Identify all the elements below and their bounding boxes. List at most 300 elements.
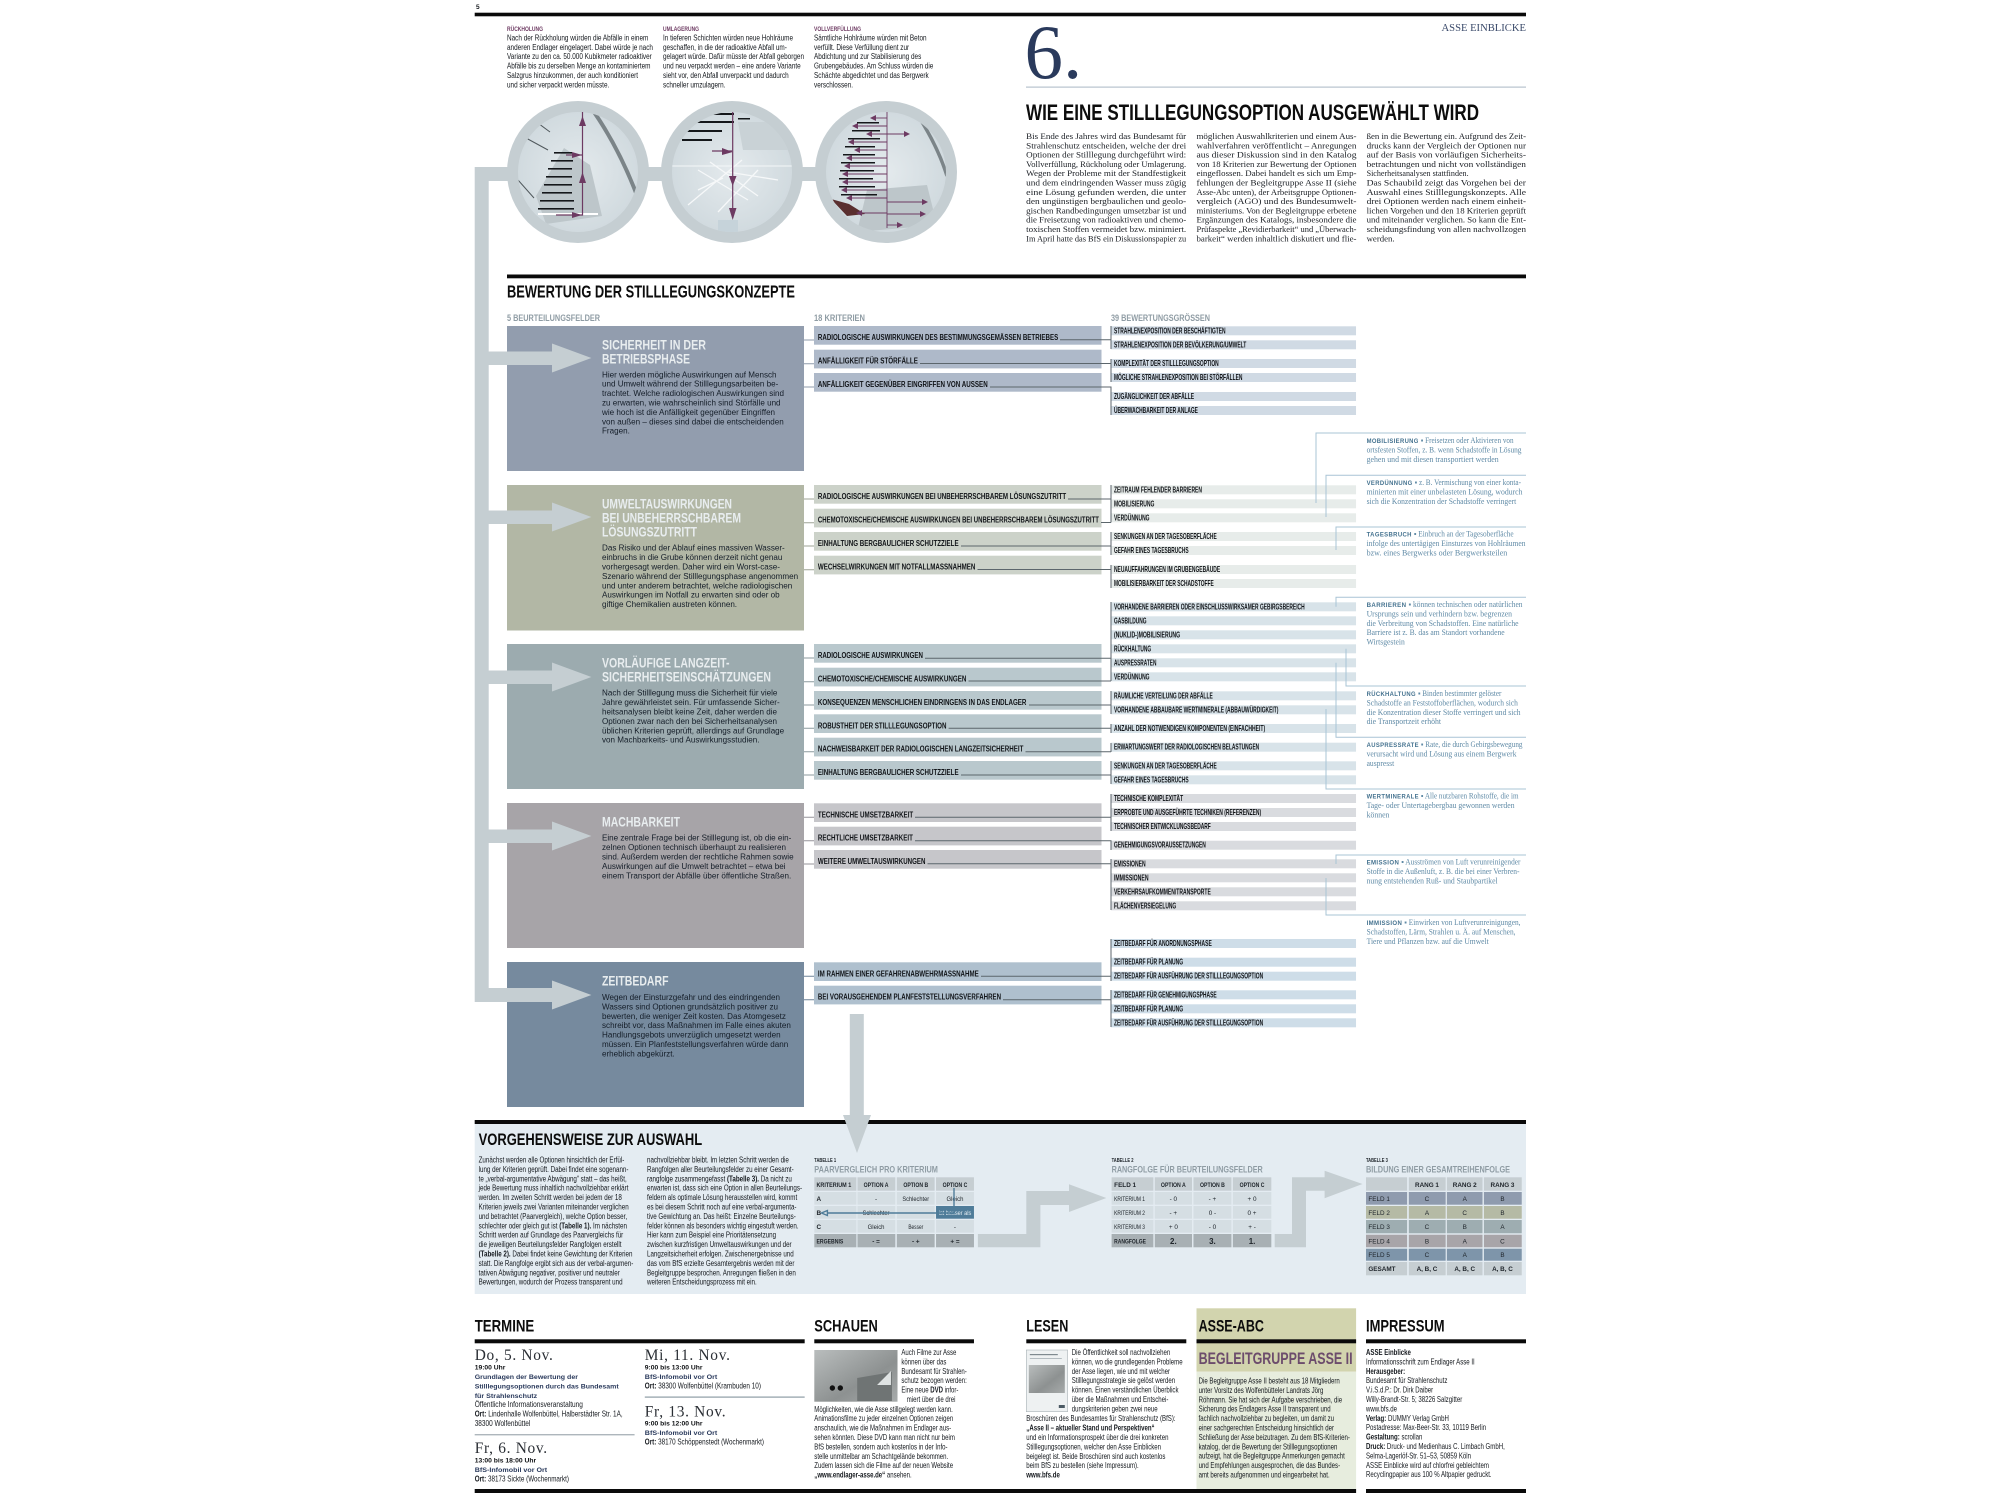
text block: intro column 2: wahlverfahren veröffentlicht – Anregungen bbox=[1196, 141, 1356, 150]
column heading: 39 Bewertungsgrößen: 39 BEWERTUNGSGRÖSSEN bbox=[1111, 312, 1210, 323]
body text: Nach der Stilllegung muss die Sicherheit für viele bbox=[602, 689, 778, 698]
text column 1: und betrachtet (Paarvergleich), welche Option besser, bbox=[479, 1213, 627, 1221]
subheading: BEGLEITGRUPPE ASSE II bbox=[1199, 1350, 1353, 1368]
text block: intro column 2: fehlungen der Begleitgruppe Asse II (siehe bbox=[1196, 178, 1357, 188]
text: Herausgeber: bbox=[1366, 1368, 1405, 1376]
text: Vollverfüllung: VOLLVERFÜLLUNG bbox=[814, 24, 861, 33]
term: Verdünnung: minierten mit einer unbelasteten Lösung, wodurch bbox=[1367, 487, 1523, 496]
heading: SCHAUEN bbox=[814, 1318, 878, 1336]
panel: criteria labels: RECHTLICHE UMSETZBARKEIT bbox=[818, 833, 914, 843]
table 3: Bildung einer Gesamtreihenfolge: C bbox=[1462, 1210, 1467, 1217]
text column 2: felder können als besonders wichtig eingestuft werden. bbox=[647, 1223, 799, 1231]
value labels: VORHANDENE ABBAUBARE WERTMINERALE (ABBAUWÜRDIGKEIT) bbox=[1114, 705, 1279, 714]
text below image: Möglichkeiten, wie die Asse stillgelegt werden kann. bbox=[814, 1406, 953, 1414]
text below image: Stilllegungsoptionen, welcher den Asse Einblicken bbox=[1026, 1444, 1161, 1452]
table 1: Paarvergleich pro Kriterium: Besser bbox=[908, 1224, 924, 1231]
table 1: Paarvergleich pro Kriterium: - bbox=[954, 1224, 956, 1231]
term: Emission bbox=[1367, 857, 1521, 885]
panel: Vorgehensweise zur Auswahl bbox=[475, 1120, 1526, 1294]
text block: intro column 2: aus dieser Diskussion sind in den Katalog bbox=[1196, 151, 1356, 160]
event: Do, 5. Nov.: Öffentliche Informationsveranstaltung bbox=[475, 1400, 583, 1409]
heading: VORGEHENSWEISE ZUR AUSWAHL bbox=[479, 1131, 702, 1149]
text column 2: rangfolge zusammengefasst (Tabelle 3). Da nicht zu bbox=[647, 1176, 792, 1184]
body text: Auswirkungen auf die Umwelt betrachtet – etwa bei bbox=[602, 862, 786, 871]
body text bbox=[602, 993, 791, 1058]
panel: criteria labels: WECHSELWIRKUNGEN MIT NOTFALLMASSNAHMEN bbox=[818, 562, 975, 572]
table 2: Rangfolge für Beurteilungsfelder: KRITERIUM 2 bbox=[1114, 1210, 1145, 1217]
text block: intro column 3: Auswahl eines Stilllegungskonzepts. Alle bbox=[1367, 188, 1526, 197]
panel: glossary bbox=[1367, 436, 1525, 946]
panel: Zeitbedarf bbox=[488, 962, 804, 1107]
text: Vollverfüllung: verschlossen. bbox=[814, 81, 853, 90]
text: können über das bbox=[901, 1359, 947, 1367]
panel: Vorläufige Langzeit-Sicherheitseinschätzungen bbox=[488, 644, 804, 789]
event: Fr, 13. Nov.: 9:00 bis 12:00 Uhr bbox=[645, 1420, 703, 1428]
panel: criteria labels: NACHWEISBARKEIT DER RADIOLOGISCHEN LANGZEITSICHERHEIT bbox=[818, 744, 1024, 754]
text block: intro column 1: Bis Ende des Jahres wird das Bundesamt für bbox=[1026, 132, 1186, 141]
text block: intro column 1: gischen Randbedingungen umsetzbar ist und bbox=[1026, 206, 1186, 215]
event: Do, 5. Nov. bbox=[475, 1347, 623, 1428]
body text: Eine zentrale Frage bei der Stilllegung ist, ob die ein- bbox=[602, 834, 792, 843]
arrow: comparison reading direction bbox=[821, 1188, 954, 1216]
table 2: Rangfolge für Beurteilungsfelder: 3. bbox=[1209, 1237, 1216, 1246]
table 2: Rangfolge für Beurteilungsfelder: - 0 bbox=[1209, 1224, 1217, 1231]
text block: intro column 3: und miteinander verglichen. So kann die Ent- bbox=[1367, 216, 1526, 225]
text: und Empfehlungen ausgesprochen, die das Bundes- bbox=[1199, 1463, 1341, 1470]
table 1: Paarvergleich pro Kriterium: OPTION A bbox=[864, 1182, 889, 1189]
panel: criteria labels: IM RAHMEN EINER GEFAHRENABWEHRMASSNAHME bbox=[818, 968, 979, 978]
event: Mi, 11. Nov.: BfS-Infomobil vor Ort bbox=[645, 1374, 718, 1381]
table 3: Bildung einer Gesamtreihenfolge: RANG 2 bbox=[1453, 1182, 1477, 1189]
table 1: Paarvergleich pro Kriterium: ist besser als bbox=[939, 1210, 971, 1217]
table 3: Bildung einer Gesamtreihenfolge: B bbox=[1425, 1238, 1429, 1246]
heading: Bewertung der Stilllegungskonzepte: BEWERTUNG DER STILLLEGUNGSKONZEPTE bbox=[507, 282, 795, 302]
table 1: Paarvergleich pro Kriterium: Gleich bbox=[947, 1196, 964, 1203]
value labels: NEUAUFFAHRUNGEN IM GRUBENGEBÄUDE bbox=[1114, 565, 1220, 574]
table 1: Paarvergleich pro Kriterium: - + bbox=[912, 1238, 920, 1246]
value labels: STRAHLENEXPOSITION DER BEVÖLKERUNG/UMWELT bbox=[1114, 340, 1246, 349]
image: film still bbox=[814, 1350, 898, 1402]
table 3: Bildung einer Gesamtreihenfolge: A bbox=[1463, 1238, 1468, 1246]
panel: Asse-ABC bbox=[1196, 1318, 1356, 1480]
body text: giftige Chemikalien austreten können. bbox=[602, 600, 737, 609]
title: VORLÄUFIGE LANGZEIT- bbox=[602, 654, 730, 670]
body text: sind. Außerdem werden der rechtliche Rahmen sowie bbox=[602, 853, 794, 861]
panel: criteria labels: CHEMOTOXISCHE/CHEMISCHE AUSWIRKUNGEN BEI UNBEHERRSCHBAREM LÖSUNGSZUTRITT bbox=[818, 515, 1099, 525]
title: MACHBARKEIT bbox=[602, 814, 680, 830]
table 3: Bildung einer Gesamtreihenfolge: A bbox=[1500, 1224, 1505, 1231]
value labels: SENKUNGEN AN DER TAGESOBERFLÄCHE bbox=[1114, 532, 1217, 541]
text column 2: Langzeitsicherheit erfolgen. Zwischenergebnisse und bbox=[647, 1251, 794, 1259]
text block: intro column 1: toxischen Stoffen vermeidet bzw. minimiert. bbox=[1026, 225, 1186, 234]
value labels: (NUKLID-)MOBILISIERUNG bbox=[1114, 630, 1180, 639]
text: Röhmann. Sie hat sich der Aufgabe verschrieben, die bbox=[1199, 1397, 1342, 1405]
arrow: table 2 to table 3 bbox=[1275, 1171, 1362, 1247]
text beside image: Die Öffentlichkeit soll nachvollziehen bbox=[1072, 1348, 1170, 1357]
text column 2: tive Gewichtung an. Das heißt: Einzelne Beurteilungs- bbox=[647, 1213, 796, 1221]
title: BETRIEBSPHASE bbox=[602, 350, 690, 366]
table 3: Bildung einer Gesamtreihenfolge: A bbox=[1463, 1252, 1468, 1259]
arrow bbox=[488, 502, 591, 532]
text: aufzeigt, hat die Begleitgruppe Anmerkungen gemacht bbox=[1199, 1453, 1345, 1461]
term: Tagesbruch: TAGESBRUCH ▪ Einbruch an der Tagesoberfläche bbox=[1367, 529, 1514, 539]
text block: intro column 3: ßen in die Bewertung ein. Aufgrund des Zeit- bbox=[1367, 132, 1526, 141]
icon: circle Umlagerung bbox=[661, 101, 803, 243]
text: einer sachgerechten Entscheidung hinsichtlich der bbox=[1199, 1425, 1335, 1433]
table 1: Paarvergleich pro Kriterium: ERGEBNIS bbox=[816, 1238, 843, 1246]
arrow bbox=[488, 662, 591, 692]
text below image: Zudem lassen sich die Filme auf der neuen Website bbox=[814, 1463, 953, 1470]
text block: intro column 1: und dem eindringenden Wasser muss zügig bbox=[1026, 178, 1186, 188]
panel: Sicherheit in der Betriebsphase bbox=[488, 326, 804, 471]
icon: circle Rückholung bbox=[507, 101, 649, 243]
text: Rückholung: RÜCKHOLUNG bbox=[507, 24, 543, 33]
text block: intro column 2: barkeit“ werden inhaltlich diskutiert und flie- bbox=[1196, 234, 1357, 243]
group 2 bars bbox=[1111, 485, 1356, 588]
table 1: Paarvergleich pro Kriterium: - = bbox=[872, 1238, 880, 1246]
term: Tagesbruch: bzw. eines Bergwerks oder Bergwerksteilen bbox=[1367, 548, 1507, 557]
table 3: Bildung einer Gesamtreihenfolge: RANG 1 bbox=[1415, 1182, 1439, 1189]
event: Fr, 13. Nov. bbox=[645, 1403, 764, 1446]
table 1: Paarvergleich pro Kriterium: B bbox=[816, 1210, 821, 1217]
value labels: ZEITBEDARF FÜR ANORDNUNGSPHASE bbox=[1114, 939, 1212, 948]
term: Mobilisierung bbox=[1367, 436, 1522, 464]
table 3: Bildung einer Gesamtreihenfolge: FELD 2 bbox=[1368, 1210, 1390, 1217]
event: Mi, 11. Nov. bbox=[645, 1347, 761, 1390]
text: Selma-Lagerlöf-Str. 51–53, 50859 Köln bbox=[1366, 1453, 1471, 1461]
body text: vorhergesagt werden. Daher wird ein Worst-case- bbox=[602, 563, 780, 571]
text block: intro column 3: drucks kann der Vergleich der Optionen nur bbox=[1367, 141, 1526, 150]
text below image: anschaulich, wie die Maßnahmen im Endlager aus- bbox=[814, 1425, 952, 1433]
text column 1: te „verbal-argumentative Abwägung“ statt – das heißt, bbox=[479, 1176, 627, 1184]
text: ASSE Einblicke bbox=[1366, 1349, 1411, 1357]
text column 2: nachvollziehbar bleibt. Im letzten Schritt werden die bbox=[647, 1157, 789, 1165]
table 2: Rangfolge für Beurteilungsfelder: 1. bbox=[1249, 1237, 1255, 1246]
panel: criteria labels bbox=[818, 332, 1099, 1002]
text block: intro column 1: Vollverfüllung, Rückholung oder Umlagerung. bbox=[1026, 160, 1186, 169]
text block: intro column 2: vergleich (AGO) und des Bundesumwelt- bbox=[1196, 197, 1357, 206]
body text: Wassers sind Optionen grundsätzlich positiver zu bbox=[602, 1002, 778, 1011]
panel: criteria bars bbox=[814, 326, 1102, 1004]
event: Do, 5. Nov.: Stilllegungsoptionen durch das Bundesamt bbox=[475, 1383, 619, 1390]
table 2: Rangfolge für Beurteilungsfelder: + 0 bbox=[1169, 1224, 1178, 1231]
term: Mobilisierung: ortsfesten Stoffen, z. B. wenn Schadstoffe in Lösung bbox=[1367, 445, 1522, 454]
text column 1: Bewertungen, wodurch der Prozess transparent und bbox=[479, 1279, 623, 1287]
text beside image: können, wo die grundlegenden Probleme bbox=[1072, 1359, 1183, 1367]
text column 1 bbox=[478, 1157, 634, 1287]
term: Auspressrate: verursacht wird und Lösung aus einem Bergwerk bbox=[1367, 749, 1517, 758]
panel: 39 assessment values bbox=[1111, 326, 1356, 1027]
value labels: AUSPRESSRATEN bbox=[1114, 658, 1157, 667]
text: Umlagerung bbox=[663, 26, 804, 90]
term: Wertminerale bbox=[1367, 791, 1519, 819]
panel: criteria labels: RADIOLOGISCHE AUSWIRKUNGEN DES BESTIMMUNGSGEMÄSSEN BETRIEBES bbox=[818, 332, 1058, 342]
arrow bbox=[488, 822, 591, 850]
text: katalog, der die Bewertung der Stilllegungsoptionen bbox=[1199, 1444, 1338, 1452]
table 1: Paarvergleich pro Kriterium: Gleich bbox=[868, 1224, 885, 1231]
table 2: Rangfolge für Beurteilungsfelder: KRITERIUM 3 bbox=[1114, 1224, 1145, 1231]
text beside image: können. Einen verständlichen Überblick bbox=[1072, 1386, 1179, 1395]
text: Bundesamt für Strahlen- bbox=[901, 1368, 967, 1376]
text below image: sehen könnten. Diese DVD kann man nicht nur beim bbox=[814, 1434, 955, 1442]
value labels bbox=[1114, 326, 1305, 1027]
value labels: EMISSIONEN bbox=[1114, 859, 1146, 868]
text block: intro column 2: eingeflossen. Dabei handelt es sich um Emp- bbox=[1196, 169, 1357, 178]
text column 2: erwarten ist, dass sich eine Option in allen Beurteilungs- bbox=[647, 1185, 803, 1193]
publication name: ASSE EINBLICKE bbox=[1442, 23, 1526, 34]
body text: zu erwarten, wie wahrscheinlich sind Störfälle und bbox=[602, 399, 781, 407]
value labels: ZUGÄNGLICHKEIT DER ABFÄLLE bbox=[1114, 392, 1194, 401]
text beside image: dungskriterien geben zwei neue bbox=[1072, 1406, 1158, 1414]
text: Sicherung des Endlagers Asse II transparent und bbox=[1199, 1406, 1331, 1414]
text: Postadresse: Max-Beer-Str. 33, 10119 Berlin bbox=[1366, 1425, 1486, 1432]
text: Umlagerung: sieht vor, den Abfall unverpackt und dadurch bbox=[663, 71, 789, 80]
text block: intro column 1: Optionen der Stilllegung durchgeführt wird: bbox=[1026, 151, 1186, 160]
body text: einem Transport der Abfälle über öffentliche Straßen. bbox=[602, 871, 791, 880]
value labels: GENEHMIGUNGSVORAUSSETZUNGEN bbox=[1114, 841, 1206, 850]
table 3: Bildung einer Gesamtreihenfolge: A, B, C bbox=[1492, 1266, 1513, 1273]
body text: trachtet. Welche radiologischen Auswirkungen sind bbox=[602, 389, 784, 398]
body text: schreibt vor, dass Maßnahmen im Falle eines akuten bbox=[602, 1021, 791, 1030]
table 3: Bildung einer Gesamtreihenfolge: B bbox=[1500, 1196, 1505, 1203]
table 3: Bildung einer Gesamtreihenfolge: BILDUNG EINER GESAMTREIHENFOLGE bbox=[1366, 1165, 1510, 1175]
table 1: Paarvergleich pro Kriterium: Schlechter bbox=[863, 1210, 890, 1217]
text column 1: jede Bewertung muss inhaltlich nachvollziehbar erklärt bbox=[478, 1185, 628, 1193]
term: Tagesbruch: infolge des untertägigen Einsturzes von Hohlräumen bbox=[1367, 539, 1525, 548]
term: Auspressrate: AUSPRESSRATE ▪ Rate, die durch Gebirgsbewegung bbox=[1367, 740, 1523, 749]
section rule bbox=[507, 274, 1526, 278]
term: Barrieren: Wirtsgestein bbox=[1367, 638, 1405, 647]
text block: intro column 1: eine Lösung gefunden werden, die unter bbox=[1026, 188, 1187, 197]
text column 1: lung der Kriterien geprüft. Dabei findet eine sogenann- bbox=[479, 1166, 629, 1174]
text below image: stelle unmittelbar am Schachtgelände bekommen. bbox=[814, 1453, 948, 1461]
event: Fr, 6. Nov.: Fr, 6. Nov. bbox=[475, 1440, 548, 1457]
text beside image: Stilllegungsstrategie sie gelöst werden bbox=[1072, 1378, 1175, 1385]
text: Informationsschrift zum Endlager Asse II bbox=[1366, 1359, 1475, 1367]
table 2: Rangfolge für Beurteilungsfelder: TABELLE 2 bbox=[1112, 1158, 1133, 1164]
event: Fr, 6. Nov.: BfS-Infomobil vor Ort bbox=[475, 1467, 548, 1474]
term: Emission: nung entstehenden Ruß- und Staubpartikel bbox=[1367, 876, 1498, 885]
table 3: Bildung einer Gesamtreihenfolge: A bbox=[1463, 1196, 1468, 1203]
event: Do, 5. Nov.: für Strahlenschutz bbox=[475, 1393, 538, 1400]
term: Rückhaltung: Schadstoffe an Feststoffoberflächen, wodurch sich bbox=[1367, 698, 1518, 707]
text block: intro column 1: die Freisetzung von radioaktiven und chemo- bbox=[1026, 216, 1186, 225]
term: Barrieren bbox=[1367, 600, 1523, 647]
text below image: www.bfs.de bbox=[1025, 1472, 1060, 1480]
body text: Hier werden mögliche Auswirkungen auf Mensch bbox=[602, 370, 777, 379]
text bbox=[1199, 1378, 1350, 1480]
table 2: Rangfolge für Beurteilungsfelder: 0 - bbox=[1209, 1210, 1216, 1217]
table 2: Rangfolge für Beurteilungsfelder: - + bbox=[1170, 1210, 1177, 1217]
body text: müssen. Ein Planfeststellungsverfahren würde dann bbox=[602, 1040, 788, 1049]
group 3 bars bbox=[1111, 602, 1356, 784]
term: Emission: EMISSION ▪ Ausströmen von Luft verunreinigender bbox=[1367, 857, 1521, 867]
text block: intro column 3: auf der Basis von vorläufigen Sicherheits- bbox=[1367, 151, 1526, 160]
table 2: Rangfolge für Beurteilungsfelder: FELD 1 bbox=[1114, 1182, 1137, 1189]
text: Umlagerung: gelagert würde. Dafür müsste der Abfall geborgen bbox=[663, 53, 804, 61]
text: Vollverfüllung: Abdichtung und zur Stabilisierung des bbox=[814, 53, 922, 61]
body text: Jahre gewährleistet sein. Für umfassende Sicher- bbox=[602, 698, 780, 707]
text: amt bereits aufgenommen und eingearbeitet hat. bbox=[1199, 1472, 1330, 1480]
term: Barrieren: die Verbreitung von Schadstoffen. Eine natürliche bbox=[1367, 619, 1519, 628]
value labels: ZEITBEDARF FÜR PLANUNG bbox=[1114, 958, 1183, 967]
divider bbox=[1026, 87, 1526, 88]
text block: intro column 3: Sicherheitsanalysen stattfinden. bbox=[1367, 169, 1469, 178]
table 2: Rangfolge für Beurteilungsfelder: RANGFOLGE bbox=[1114, 1238, 1146, 1246]
text: Umlagerung: geschaffen, in die der radioaktive Abfall um- bbox=[663, 43, 787, 52]
text: Vollverfüllung bbox=[814, 24, 933, 90]
text: Schließung der Asse beizutragen. Zu dem BfS-Kriterien- bbox=[1199, 1434, 1350, 1442]
title: ZEITBEDARF bbox=[602, 973, 669, 989]
body text: von außen – dieses sind dabei die entscheidenden bbox=[602, 417, 784, 426]
table 1: Paarvergleich pro Kriterium: KRITERIUM 1 bbox=[816, 1182, 852, 1189]
heading: ASSE-ABC bbox=[1199, 1318, 1264, 1336]
table 3: Bildung einer Gesamtreihenfolge: FELD 5 bbox=[1368, 1252, 1390, 1259]
text block: intro column 2: Ergänzungen des Katalogs, insbesondere die bbox=[1196, 216, 1357, 225]
term: Rückhaltung: die Konzentration dieser Stoffe verringert und sich bbox=[1367, 708, 1521, 717]
text block: intro column 3: Das Schaubild zeigt das Vorgehen bei der bbox=[1367, 178, 1526, 188]
value labels: VORHANDENE BARRIEREN ODER EINSCHLUSSWIRKSAMER GEBIRGSBEREICH bbox=[1114, 602, 1305, 611]
table 1: Paarvergleich pro Kriterium: OPTION C bbox=[943, 1182, 968, 1189]
text block: intro column 3 bbox=[1367, 132, 1527, 243]
table 2: Rangfolge für Beurteilungsfelder: KRITERIUM 1 bbox=[1114, 1196, 1145, 1203]
table 3: Bildung einer Gesamtreihenfolge: FELD 4 bbox=[1368, 1238, 1390, 1246]
value labels: RÄUMLICHE VERTEILUNG DER ABFÄLLE bbox=[1114, 691, 1213, 700]
text block: intro column 1 bbox=[1026, 132, 1187, 243]
event: Fr, 13. Nov.: Ort: 38170 Schöppenstedt (Wochenmarkt) bbox=[645, 1437, 764, 1446]
body text: Optionen zwar nach den bei Sicherheitsanalysen bbox=[602, 717, 777, 726]
text: V.i.S.d.P.: Dr. Dirk Daiber bbox=[1366, 1387, 1434, 1395]
event: Fr, 6. Nov. bbox=[475, 1440, 569, 1484]
text below image bbox=[814, 1406, 955, 1480]
text column 2: Hier kann zum Beispiel eine Prioritätensetzung bbox=[647, 1232, 776, 1240]
event: Do, 5. Nov.: 19:00 Uhr bbox=[475, 1364, 506, 1372]
table 3: Bildung einer Gesamtreihenfolge: C bbox=[1500, 1238, 1505, 1246]
table 3: Bildung einer Gesamtreihenfolge: RANG 3 bbox=[1491, 1182, 1515, 1189]
term: Barrieren: Barriere ist z. B. das am Standort vorhandene bbox=[1367, 628, 1505, 637]
event: Mi, 11. Nov.: Mi, 11. Nov. bbox=[645, 1347, 731, 1364]
body text: Auswirkungen im Notfall zu erwarten sind oder ob bbox=[602, 591, 780, 600]
text below image: Broschüren des Bundesamtes für Strahlenschutz (BfS): bbox=[1026, 1416, 1176, 1423]
column heading: 5 Beurteilungsfelder: 5 BEURTEILUNGSFELDER bbox=[507, 312, 600, 323]
icon: circle Vollverfüllung bbox=[815, 101, 957, 243]
panel: ASSE-ABC background bbox=[1196, 1308, 1356, 1491]
table 3: Bildung einer Gesamtreihenfolge: C bbox=[1425, 1224, 1430, 1231]
text: Vollverfüllung: verfüllt. Diese Verfüllung dient zur bbox=[814, 43, 910, 52]
heading: Wie eine Stilllegungsoption ausgewählt wird: WIE EINE STILLLEGUNGSOPTION AUSGEWÄHLT WIRD bbox=[1026, 100, 1479, 125]
term: Immission: IMMISSION ▪ Einwirken von Luftverunreinigungen, bbox=[1367, 918, 1521, 927]
heading: IMPRESSUM bbox=[1366, 1318, 1444, 1336]
term: Mobilisierung: MOBILISIERUNG ▪ Freisetzen oder Aktivieren von bbox=[1367, 436, 1514, 445]
body text bbox=[601, 370, 784, 436]
value labels: ZEITRAUM FEHLENDER BARRIEREN bbox=[1114, 485, 1202, 494]
text: Willy-Brandt-Str. 5; 38226 Salzgitter bbox=[1366, 1396, 1463, 1404]
panel: Termine bbox=[475, 1318, 805, 1484]
term: Wertminerale: Tage- oder Untertagebergbau gewonnen werden bbox=[1367, 801, 1515, 810]
text block: intro column 3: werden. bbox=[1367, 234, 1395, 243]
body text: Wegen der Einsturzgefahr und des eindringenden bbox=[602, 993, 780, 1002]
text column 2: weiteren Entscheidungsprozess mit ein. bbox=[646, 1279, 757, 1287]
term: Tagesbruch bbox=[1367, 529, 1525, 557]
text: Druck: Druck- und Medienhaus C. Limbach GmbH, bbox=[1366, 1443, 1505, 1451]
text block: intro column 1: den ungünstigen bergbaulichen und geolo- bbox=[1026, 197, 1187, 206]
value labels: GEFAHR EINES TAGESBRUCHS bbox=[1114, 775, 1189, 784]
text block: intro column 3: drei Optionen werden nach einem einheit- bbox=[1367, 197, 1526, 206]
body text: Das Risiko und der Ablauf eines massiven Wasser- bbox=[602, 544, 785, 553]
event: Do, 5. Nov.: Ort: Lindenhalle Wolfenbüttel, Halberstädter Str. 1A, bbox=[475, 1410, 623, 1419]
bottom rules bbox=[475, 1489, 1526, 1493]
term: Verdünnung: VERDÜNNUNG ▪ z. B. Vermischung von einer konta- bbox=[1367, 478, 1521, 487]
event: Do, 5. Nov.: Grundlagen der Bewertung der bbox=[475, 1374, 578, 1381]
table 3: Bildung einer Gesamtreihenfolge bbox=[1366, 1158, 1522, 1275]
text block: intro column 2: ministeriums. Von der Begleitgruppe erbetene bbox=[1196, 206, 1357, 215]
value labels: MOBILISIERBARKEIT DER SCHADSTOFFE bbox=[1114, 579, 1214, 588]
panel: criteria labels: CHEMOTOXISCHE/CHEMISCHE AUSWIRKUNGEN bbox=[818, 674, 966, 684]
text bbox=[901, 1349, 967, 1404]
text block: intro column 1: Im April hatte das BfS ein Diskussionspapier zu bbox=[1026, 234, 1186, 243]
panel: criteria labels: EINHALTUNG BERGBAULICHER SCHUTZZIELE bbox=[818, 538, 959, 548]
body text bbox=[602, 834, 794, 880]
value labels: GEFAHR EINES TAGESBRUCHS bbox=[1114, 546, 1189, 555]
term: Barrieren: BARRIEREN ▪ können technischen oder natürlichen bbox=[1367, 600, 1523, 609]
heading: LESEN bbox=[1026, 1318, 1068, 1336]
body text: üblichen Kriterien geprüft, allerdings auf Grundlage bbox=[602, 726, 785, 735]
panel: criteria labels: ANFÄLLIGKEIT GEGENÜBER EINGRIFFEN VON AUSSEN bbox=[818, 379, 988, 389]
event: Fr, 13. Nov.: BfS-Infomobil vor Ort bbox=[645, 1430, 718, 1437]
text block: intro column 1: Strahlenschutz entscheiden, welche der drei bbox=[1026, 141, 1187, 150]
event: Do, 5. Nov.: 38300 Wolfenbüttel bbox=[475, 1419, 531, 1428]
value labels: TECHNISCHE KOMPLEXITÄT bbox=[1114, 794, 1183, 803]
text below image: und ein Informationsprospekt über die drei konkreten bbox=[1026, 1434, 1169, 1442]
table 2: Rangfolge für Beurteilungsfelder: RANGFOLGE FÜR BEURTEILUNGSFELDER bbox=[1112, 1165, 1263, 1175]
group 1 bars bbox=[1111, 326, 1356, 415]
event: Fr, 13. Nov.: Fr, 13. Nov. bbox=[645, 1403, 726, 1421]
text column 2 bbox=[646, 1157, 803, 1287]
term: Verdünnung: sich die Konzentration der Schadstoffe verringert bbox=[1367, 497, 1517, 506]
text: Verlag: DUMMY Verlag GmbH bbox=[1366, 1415, 1449, 1423]
text block: intro column 1: Wegen der Probleme mit der Standfestigkeit bbox=[1026, 169, 1187, 178]
term: Immission: Tiere und Pflanzen bzw. auf die Umwelt bbox=[1367, 937, 1489, 946]
table 3: Bildung einer Gesamtreihenfolge: A, B, C bbox=[1417, 1266, 1438, 1273]
text column 1: Zunächst werden alle Optionen hinsichtlich der Erfül- bbox=[479, 1157, 625, 1165]
term: Auspressrate bbox=[1367, 740, 1523, 768]
value labels: IMMISSIONEN bbox=[1114, 873, 1149, 882]
body text bbox=[602, 544, 798, 609]
title: SICHERHEIT IN DER bbox=[602, 336, 706, 352]
term: Auspressrate: auspresst bbox=[1367, 759, 1395, 768]
term: Emission: Stoffe in die Außenluft, z. B. die bei einer Verbren- bbox=[1367, 867, 1520, 876]
body text: Fragen. bbox=[602, 427, 630, 436]
panel: criteria labels: EINHALTUNG BERGBAULICHER SCHUTZZIELE bbox=[818, 767, 959, 777]
value labels: VERDÜNNUNG bbox=[1114, 513, 1150, 522]
group 5 bars bbox=[1111, 939, 1356, 1027]
text: miert über die drei bbox=[907, 1396, 956, 1404]
table 1: Paarvergleich pro Kriterium: C bbox=[816, 1224, 821, 1231]
table 3: Bildung einer Gesamtreihenfolge: B bbox=[1500, 1252, 1505, 1259]
table 2: Rangfolge für Beurteilungsfelder: OPTION A bbox=[1161, 1182, 1186, 1189]
table 1: Paarvergleich pro Kriterium: Schlechter bbox=[902, 1196, 930, 1203]
text below image: beim BfS zu bestellen (siehe Impressum). bbox=[1026, 1463, 1139, 1470]
group 4 bars bbox=[1111, 794, 1356, 910]
text block: intro column 3: lichen Vorgehen und den 18 Kriterien geprüft bbox=[1367, 206, 1527, 215]
page number: 5 bbox=[476, 4, 480, 11]
text: Recyclingpapier aus 100 % Altpapier gedruckt. bbox=[1366, 1472, 1492, 1479]
term: Wertminerale: können bbox=[1367, 810, 1389, 819]
text: Umlagerung: UMLAGERUNG bbox=[663, 26, 699, 33]
text column 1: (Tabelle 2). Dabei findet keine Gewichtung der Kriterien bbox=[479, 1251, 632, 1259]
title: LÖSUNGSZUTRITT bbox=[602, 523, 697, 539]
heading: TERMINE bbox=[475, 1318, 534, 1336]
